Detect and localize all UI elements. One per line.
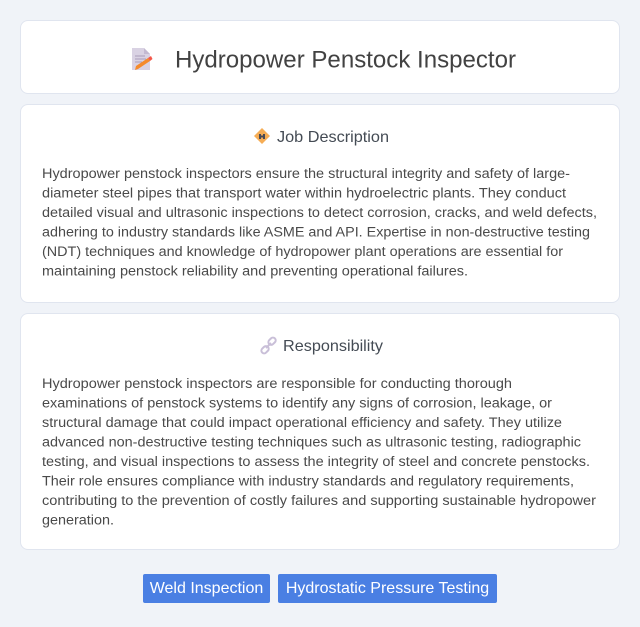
icon: diamond sign bbox=[254, 128, 270, 144]
responsibility text: Their role ensures compliance with industry standards and regulatory requirements, bbox=[42, 474, 574, 490]
responsibility text: examinations of penstock systems to identify any signs of corrosion, leakage, or bbox=[42, 396, 552, 412]
responsibility text: generation. bbox=[42, 512, 114, 528]
heading: responsibility: Responsibility bbox=[283, 338, 383, 355]
job description text: diameter steel pipes that transport water within hydroelectric plants. They conduct bbox=[42, 186, 566, 202]
tag: hydrostatic pressure testing: Hydrostatic Pressure Testing bbox=[286, 580, 489, 597]
tag: hydrostatic pressure testing bbox=[278, 574, 497, 603]
responsibility text bbox=[42, 376, 596, 528]
job description text: detailed visual and ultrasonic inspections to detect corrosion, cracks, and weld defects, bbox=[42, 205, 597, 221]
tag: weld inspection bbox=[143, 574, 270, 603]
responsibility text: Hydropower penstock inspectors are responsible for conducting thorough bbox=[42, 376, 512, 392]
job description text: (NDT) techniques and knowledge of hydropower plant operations are essential for bbox=[42, 244, 563, 260]
icon: document with pencil bbox=[132, 48, 152, 70]
icon: chain link bbox=[260, 336, 277, 354]
panel: title bbox=[20, 20, 620, 94]
job description text: Hydropower penstock inspectors ensure the structural integrity and safety of large- bbox=[42, 166, 570, 182]
responsibility text: structural damage that could impact operational efficiency and safety. They utilize bbox=[42, 415, 562, 431]
tag: weld inspection: Weld Inspection bbox=[150, 580, 263, 597]
panel: job description bbox=[20, 104, 620, 303]
heading: job description: Job Description bbox=[277, 129, 389, 146]
responsibility text: testing, and visual inspections to assess the integrity of steel and concrete penstocks. bbox=[42, 454, 590, 470]
title text: Hydropower Penstock Inspector bbox=[175, 46, 516, 74]
job description text bbox=[42, 166, 597, 280]
panel: responsibility bbox=[20, 313, 620, 550]
job description text: adhering to industry standards like ASME and API. Expertise in non-destructive testing bbox=[42, 224, 590, 240]
responsibility text: advanced non-destructive testing techniques such as ultrasonic testing, radiographic bbox=[42, 434, 581, 450]
responsibility text: contributing to the prevention of costly failures and supporting sustainable hydropower bbox=[42, 493, 596, 509]
job description text: maintaining penstock reliability and preventing operational failures. bbox=[42, 264, 468, 280]
